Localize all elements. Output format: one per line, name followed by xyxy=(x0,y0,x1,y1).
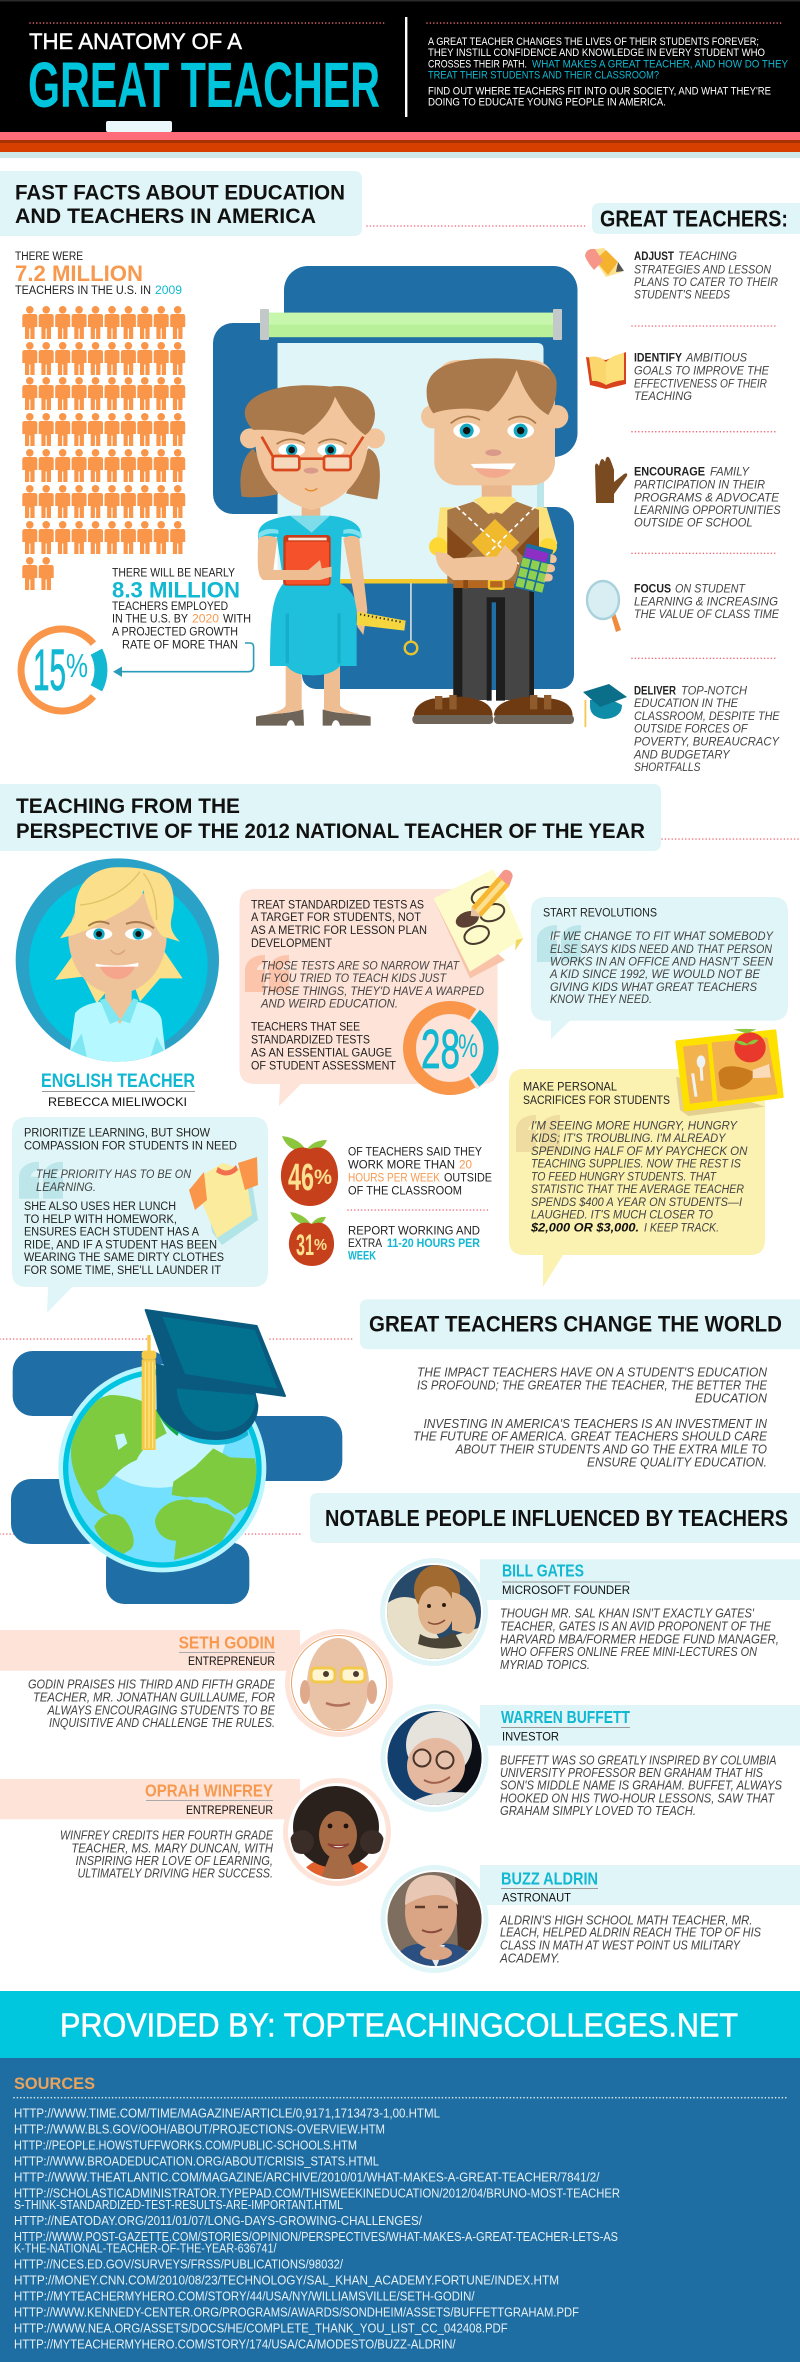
source links: HTTP://WWW.TIME.COM/TIME/MAGAZINE/ARTICLE/0,9171,1713473-1,00.HTML xyxy=(14,2107,440,2121)
text: impact of teachers: THE IMPACT TEACHERS HAVE ON A STUDENT'S EDUCATION xyxy=(417,1366,768,1380)
quote: revolutions: A KID SINCE 1992, WE WOULD NOT BE xyxy=(549,969,760,981)
blue bars xyxy=(11,1351,342,1604)
profile: seth godin xyxy=(0,1629,393,1737)
text: oprah winfrey: ULTIMATELY DRIVING HER SUCCESS. xyxy=(78,1867,273,1881)
text: treat standardized tests xyxy=(251,899,427,950)
text: lunch help: TO HELP WITH HOMEWORK, xyxy=(24,1214,177,1226)
heading: prioritize learning xyxy=(24,1128,237,1152)
quote: revolutions: WORKS IN AN OFFICE AND HASN'T SEEN xyxy=(550,956,774,968)
illustration: male teacher xyxy=(412,358,574,724)
stat: 46 percent apple xyxy=(281,1136,338,1206)
item: encourage: PROGRAMS & ADVOCATE xyxy=(634,490,780,504)
icon: raised hand xyxy=(595,457,627,503)
text: impact of teachers: ENSURE QUALITY EDUCATION. xyxy=(587,1455,767,1469)
name: seth godin: ENTREPRENEUR xyxy=(188,1654,275,1668)
quote: hungry kids: I KEEP TRACK. xyxy=(644,1222,719,1234)
text: bill gates: HARVARD MBA/FORMER HEDGE FUND MANAGER, xyxy=(500,1632,779,1646)
banner: provided by xyxy=(0,1991,800,2058)
text: impact of teachers: EDUCATION xyxy=(695,1391,768,1405)
text: warren buffett xyxy=(500,1753,783,1818)
heading: great teachers change the world xyxy=(360,1299,800,1349)
item: deliver: SHORTFALLS xyxy=(634,760,700,774)
quote: narrow tests: THOSE THINGS, THEY'D HAVE A WARPED xyxy=(261,986,484,998)
trousers xyxy=(453,587,534,703)
calculator xyxy=(514,543,557,594)
title xyxy=(28,29,380,121)
item: identify: EFFECTIVENESS OF THEIR xyxy=(634,376,767,390)
item: focus: FOCUS xyxy=(634,582,671,596)
item: focus: LEARNING & INCREASING xyxy=(634,594,778,608)
quote: revolutions: ELSE SAYS KIDS NEED AND THAT PERSON xyxy=(550,944,773,956)
stat: 8.3 million projection: 8.3 MILLION xyxy=(112,577,240,602)
text: lunch help xyxy=(24,1201,224,1277)
photo: warren buffett xyxy=(380,1704,488,1812)
stat: 7.2 million teachers: TEACHERS IN THE U.S. IN xyxy=(15,285,151,297)
text: warren buffett: UNIVERSITY PROFESSOR BEN GRAHAM THAT HIS xyxy=(500,1766,764,1780)
arrow to 15 percent xyxy=(113,643,254,677)
text: lunch help: ENSURES EACH STUDENT HAS A xyxy=(24,1227,199,1239)
name: bill gates: BILL GATES xyxy=(502,1561,584,1581)
heading: sources: SOURCES xyxy=(14,2074,95,2093)
shirt xyxy=(430,507,557,555)
stat: 8.3 million projection: WITH xyxy=(223,614,251,626)
ruler xyxy=(357,612,406,631)
stat: 31 percent apple: % xyxy=(314,1237,327,1254)
donut: 15 percent: % xyxy=(66,647,88,684)
item: adjust: STUDENT'S NEEDS xyxy=(634,288,730,302)
stat: 8.3 million projection: TEACHERS EMPLOYED xyxy=(112,601,228,613)
quote: hungry kids xyxy=(530,1120,748,1234)
stat: 31 percent apple xyxy=(289,1212,334,1266)
graduation cap xyxy=(146,1310,285,1445)
quote: revolutions: KNOW THEY NEED. xyxy=(550,994,652,1006)
header intro text: CROSSES THEIR PATH. xyxy=(428,58,527,70)
stat: 46 percent apple: % xyxy=(314,1166,332,1189)
donut: 28 percent xyxy=(410,1008,491,1088)
chalk xyxy=(106,121,172,132)
stat: 8.3 million projection: 2020 xyxy=(192,614,219,626)
text: oprah winfrey: INSPIRING HER LOVE OF LEARNING, xyxy=(76,1854,273,1868)
quote: hungry kids: SPENDING HALF OF MY PAYCHECK ON xyxy=(531,1146,748,1158)
stat: 31 percent apple: 31 xyxy=(296,1229,314,1262)
quote mark xyxy=(516,1115,560,1152)
source links: HTTP://MYTEACHERMYHERO.COM/STORY/44/USA/NY/WILLIAMSVILLE/SETH-GODIN/ xyxy=(14,2289,475,2303)
stat: 7.2 million teachers: THERE WERE xyxy=(15,251,83,263)
item: identify: AMBITIOUS xyxy=(685,351,747,365)
item: adjust: PLANS TO CATER TO THEIR xyxy=(634,275,778,289)
text: 31 percent: EXTRA xyxy=(348,1238,382,1250)
item: deliver: OUTSIDE FORCES OF xyxy=(634,722,748,736)
text: impact of teachers xyxy=(413,1366,768,1469)
profile: warren buffett xyxy=(380,1704,800,1818)
quote: hungry kids: KIDS; IT'S TROUBLING. I'M ALREADY xyxy=(531,1133,727,1145)
shoes xyxy=(256,709,371,726)
text: oprah winfrey: TEACHER, MS. MARY DUNCAN, WITH xyxy=(71,1841,274,1855)
source links: S-THINK-STANDARDIZED-TEST-RESULTS-ARE-IMPORTANT.HTML xyxy=(14,2198,343,2212)
heading: start revolutions: START REVOLUTIONS xyxy=(543,908,657,920)
item: adjust: ADJUST xyxy=(634,249,675,263)
icon: sticky note and pencil xyxy=(433,869,523,978)
text: 31 percent: WEEK xyxy=(348,1251,377,1263)
item: identify xyxy=(634,351,770,403)
bubble: start revolutions xyxy=(531,897,788,1039)
text: teachers that see tests xyxy=(251,1022,396,1072)
text: seth godin: INQUISITIVE AND CHALLENGE THE RULES. xyxy=(49,1716,275,1730)
item: encourage: OUTSIDE OF SCHOOL xyxy=(634,516,753,530)
text: treat standardized tests: A TARGET FOR STUDENTS, NOT xyxy=(251,912,421,924)
text: 31 percent xyxy=(348,1225,481,1263)
quote mark xyxy=(19,1162,63,1199)
item: adjust xyxy=(634,249,778,302)
name: bill gates: MICROSOFT FOUNDER xyxy=(502,1583,630,1597)
name: buzz aldrin: ASTRONAUT xyxy=(502,1891,572,1905)
quote: revolutions: GIVING KIDS WHAT GREAT TEACHERS xyxy=(550,982,757,994)
item: encourage: FAMILY xyxy=(710,465,750,479)
text: bill gates: TEACHER, GATES IS AN AVID PROPONENT OF THE xyxy=(500,1619,772,1633)
title: THE ANATOMY OF A xyxy=(29,29,242,54)
text: bill gates: WHO OFFERS ONLINE FREE MINI-LECTURES ON xyxy=(500,1645,758,1659)
text: impact of teachers: THE FUTURE OF AMERICA. GREAT TEACHERS SHOULD CARE xyxy=(413,1430,768,1444)
heading: notable people xyxy=(310,1493,800,1543)
text: 46 percent: OUTSIDE xyxy=(444,1173,492,1185)
quote: revolutions: IF WE CHANGE TO FIT WHAT SOMEBODY xyxy=(550,931,774,943)
item: focus: ON STUDENT xyxy=(675,582,746,596)
quote: priority: LEARNING. xyxy=(36,1182,96,1194)
name: buzz aldrin: BUZZ ALDRIN xyxy=(501,1868,598,1888)
heading: personal sacrifices xyxy=(523,1082,670,1107)
arm xyxy=(435,545,517,580)
name: buzz aldrin xyxy=(501,1868,598,1905)
source links: HTTP://NCES.ED.GOV/SURVEYS/FRSS/PUBLICATIONS/98032/ xyxy=(14,2257,343,2271)
mouth xyxy=(471,463,516,478)
eyes xyxy=(277,439,347,457)
quote: hungry kids: I'M SEEING MORE HUNGRY, HUNGRY xyxy=(531,1120,738,1132)
item: deliver: DELIVER xyxy=(634,683,676,697)
item: identify: GOALS TO IMPROVE THE xyxy=(634,364,770,378)
illustration: female teacher xyxy=(240,385,406,726)
stat: 7.2 million teachers xyxy=(15,251,182,297)
text: 46 percent: 20 xyxy=(459,1160,472,1172)
icon: t-shirt xyxy=(189,1157,258,1245)
illustration: globe with graduation cap xyxy=(11,1310,342,1604)
item: encourage: LEARNING OPPORTUNITIES xyxy=(634,503,781,517)
donut: 28 percent: 28 xyxy=(421,1018,460,1080)
text: lunch help: WEARING THE SAME DIRTY CLOTHES xyxy=(24,1252,224,1264)
quote mark xyxy=(537,925,581,962)
text: warren buffett: HOOKED ON HIS TWO-HOUR LESSONS, SAW THAT xyxy=(500,1791,775,1805)
icon: magnifying glass xyxy=(587,581,621,632)
text: bill gates: THOUGH MR. SAL KHAN ISN'T EXACTLY GATES' xyxy=(500,1607,755,1621)
item: focus xyxy=(634,582,780,621)
heading: national teacher of the year: PERSPECTIVE OF THE 2012 NATIONAL TEACHER OF THE YEAR xyxy=(16,819,645,843)
caption: english teacher xyxy=(41,1071,195,1109)
source links: HTTP://WWW.BROADEDUCATION.ORG/ABOUT/CRISIS_STATS.HTML xyxy=(14,2155,379,2169)
quote: narrow tests: AND WEIRD EDUCATION. xyxy=(260,999,398,1011)
text: 31 percent: REPORT WORKING AND xyxy=(348,1225,480,1237)
heading: personal sacrifices: MAKE PERSONAL xyxy=(523,1082,618,1094)
title: GREAT TEACHER xyxy=(28,49,380,121)
text: 46 percent xyxy=(348,1147,492,1197)
quote: priority: THE PRIORITY HAS TO BE ON xyxy=(36,1169,192,1181)
arms xyxy=(258,536,332,580)
tassel xyxy=(142,1335,156,1450)
portrait: english teacher xyxy=(16,858,219,1063)
profile: bill gates xyxy=(380,1558,800,1672)
text: 46 percent: HOURS PER WEEK xyxy=(348,1173,440,1185)
name: seth godin xyxy=(179,1632,275,1668)
globe xyxy=(58,1360,266,1572)
quote: narrow tests: THOSE TESTS ARE SO NARROW THAT xyxy=(261,960,460,972)
heading: great teachers change the world: GREAT TEACHERS CHANGE THE WORLD xyxy=(369,1312,782,1337)
text: buzz aldrin: ACADEMY. xyxy=(499,1951,560,1965)
text: buzz aldrin: CLASS IN MATH AT WEST POINT US MILITARY xyxy=(500,1938,741,1952)
blind cord and ring xyxy=(405,583,417,654)
text: impact of teachers: INVESTING IN AMERICA'S TEACHERS IS AN INVESTMENT IN xyxy=(424,1417,768,1431)
item: encourage xyxy=(634,465,781,530)
text: 31 percent: 11-20 HOURS PER xyxy=(387,1238,481,1250)
source links: HTTP://MYTEACHERMYHERO.COM/STORY/174/USA/CA/MODESTO/BUZZ-ALDRIN/ xyxy=(14,2337,456,2351)
name: oprah winfrey xyxy=(145,1781,273,1817)
item: deliver: EDUCATION IN THE xyxy=(634,696,739,710)
source links: K-THE-NATIONAL-TEACHER-OF-THE-YEAR-636741/ xyxy=(14,2241,277,2255)
text: oprah winfrey xyxy=(60,1829,274,1881)
name: oprah winfrey: OPRAH WINFREY xyxy=(145,1781,273,1801)
heading: prioritize learning: COMPASSION FOR STUDENTS IN NEED xyxy=(24,1140,237,1152)
photo: oprah winfrey xyxy=(283,1778,391,1886)
name: oprah winfrey: ENTREPRENEUR xyxy=(186,1803,273,1817)
quote: revolutions xyxy=(549,931,774,1006)
quote: priority xyxy=(36,1169,192,1194)
text: 46 percent: OF TEACHERS SAID THEY xyxy=(348,1147,482,1159)
item: deliver: CLASSROOM, DESPITE THE xyxy=(634,709,780,723)
text: seth godin: ALWAYS ENCOURAGING STUDENTS TO BE xyxy=(47,1703,276,1717)
icon: open book xyxy=(586,352,626,389)
quote: hungry kids: LAUGHED. IT'S MUCH CLOSER TO xyxy=(531,1210,713,1222)
stat: 7.2 million teachers: 7.2 MILLION xyxy=(15,261,143,286)
text: lunch help: FOR SOME TIME, SHE'LL LAUNDER IT xyxy=(24,1265,221,1277)
stat: 8.3 million projection: RATE OF MORE THAN xyxy=(122,640,238,652)
item: adjust: STRATEGIES AND LESSON xyxy=(634,262,771,276)
heading: national teacher of the year xyxy=(0,784,661,851)
text: teachers that see tests: TEACHERS THAT SEE xyxy=(251,1022,360,1034)
text: bill gates xyxy=(500,1607,779,1672)
head xyxy=(434,360,555,485)
text: seth godin: TEACHER, MR. JONATHAN GUILLAUME, FOR xyxy=(33,1690,275,1704)
text: lunch help: RIDE, AND IF A STUDENT HAS BEEN xyxy=(24,1240,217,1252)
text: treat standardized tests: DEVELOPMENT xyxy=(251,938,332,950)
stat: 46 percent apple: 46 xyxy=(288,1157,314,1199)
text: buzz aldrin: LEACH, HELPED ALDRIN REACH THE TOP OF HIS xyxy=(500,1926,762,1940)
source links: HTTP://NEATODAY.ORG/2011/01/07/LONG-DAYS-GROWING-CHALLENGES/ xyxy=(14,2214,422,2228)
photo: bill gates xyxy=(380,1558,488,1666)
text: impact of teachers: IS PROFOUND; THE GREATER THE TEACHER, THE BETTER THE xyxy=(417,1378,768,1392)
header intro text xyxy=(428,36,789,108)
name: bill gates xyxy=(502,1561,630,1597)
quote: hungry kids: TEACHING SUPPLIES. NOW THE REST IS xyxy=(531,1159,741,1171)
profile: oprah winfrey xyxy=(0,1778,391,1886)
stat: 8.3 million projection xyxy=(112,568,251,652)
name: warren buffett: INVESTOR xyxy=(502,1730,559,1744)
donut: 15 percent xyxy=(21,629,101,711)
source links: HTTP://WWW.THEATLANTIC.COM/MAGAZINE/ARCHIVE/2010/01/WHAT-MAKES-A-GREAT-TEACHER/7841/2/ xyxy=(14,2171,600,2185)
item: adjust: TEACHING xyxy=(678,249,737,263)
book xyxy=(283,535,331,586)
vest xyxy=(447,497,539,583)
caption: english teacher: ENGLISH TEACHER xyxy=(41,1071,195,1092)
item: deliver: TOP-NOTCH xyxy=(681,683,747,697)
icon: graduation cap xyxy=(583,684,627,727)
heading: fast facts: AND TEACHERS IN AMERICA xyxy=(15,204,316,228)
dress xyxy=(258,516,361,675)
header intro text: DOING TO EDUCATE YOUNG PEOPLE IN AMERICA. xyxy=(428,96,666,108)
head xyxy=(255,390,368,510)
item: encourage: ENCOURAGE xyxy=(634,465,705,479)
quote: hungry kids: SPENDS $400 A YEAR ON STUDENTS—I xyxy=(531,1197,743,1209)
eyes xyxy=(451,417,536,439)
text: 46 percent: WORK MORE THAN xyxy=(348,1160,455,1172)
glasses xyxy=(262,437,363,470)
text: treat standardized tests: AS A METRIC FOR LESSON PLAN xyxy=(251,925,427,937)
stat: 8.3 million projection: A PROJECTED GROWTH xyxy=(112,627,238,639)
text: warren buffett: GRAHAM SIMPLY LOVED TO TEACH. xyxy=(500,1804,696,1818)
bubble: personal sacrifices xyxy=(509,1029,782,1287)
bubble: standardized tests xyxy=(240,869,523,1106)
bubble: prioritize learning xyxy=(12,1117,268,1313)
quote: hungry kids: TO FEED HUNGRY STUDENTS. THAT xyxy=(531,1171,717,1183)
text: treat standardized tests: TREAT STANDARDIZED TESTS AS xyxy=(251,899,424,911)
quote: narrow tests: IF YOU TRIED TO TEACH KIDS JUST xyxy=(261,973,447,985)
heading: fast facts: FAST FACTS ABOUT EDUCATION xyxy=(15,180,345,204)
illustration: classroom backdrop xyxy=(213,266,578,689)
shoes xyxy=(412,695,574,724)
heading: fast facts xyxy=(0,171,362,236)
item: identify: IDENTIFY xyxy=(634,351,682,365)
stat: 8.3 million projection: IN THE U.S. BY xyxy=(112,614,188,626)
text: teachers that see tests: OF STUDENT ASSESSMENT xyxy=(251,1060,396,1072)
caption: english teacher: REBECCA MIELIWOCKI xyxy=(48,1095,187,1109)
list: great teachers xyxy=(583,248,781,774)
name: seth godin: SETH GODIN xyxy=(179,1632,275,1652)
item: deliver: AND BUDGETARY xyxy=(633,747,731,761)
name: warren buffett xyxy=(501,1707,630,1744)
window blind roller xyxy=(260,309,562,340)
icon: pencil and eraser xyxy=(585,248,624,277)
quote: hungry kids: $2,000 OR $3,000. xyxy=(530,1222,639,1234)
item: identify: TEACHING xyxy=(634,389,692,403)
source links: HTTP://WWW.POST-GAZETTE.COM/STORIES/OPINION/PERSPECTIVES/WHAT-MAKES-A-GREAT-TEACHER-LETS-AS xyxy=(14,2230,618,2244)
photo: buzz aldrin xyxy=(380,1865,488,1973)
source links: HTTP://WWW.NEA.ORG/ASSETS/DOCS/HE/COMPLETE_THANK_YOU_LIST_CC_042408.PDF xyxy=(14,2321,508,2335)
source links: HTTP://SCHOLASTICADMINISTRATOR.TYPEPAD.COM/THISWEEKINEDUCATION/2012/04/BRUNO-MOST-TEACHER xyxy=(14,2187,620,2201)
text: buzz aldrin xyxy=(499,1913,762,1965)
banner: provided by: PROVIDED BY: TOPTEACHINGCOLLEGES.NET xyxy=(60,2007,738,2044)
heading: national teacher of the year: TEACHING FROM THE xyxy=(16,794,240,818)
stat: 7.2 million teachers: 2009 xyxy=(155,285,182,297)
source links: HTTP://WWW.BLS.GOV/OOH/ABOUT/PROJECTIONS-OVERVIEW.HTM xyxy=(14,2123,385,2137)
belt xyxy=(453,579,514,589)
chalkboard ledge stripes xyxy=(0,132,800,158)
quote: hungry kids: STATISTIC THAT THE AVERAGE TEACHER xyxy=(531,1184,744,1196)
source links: HTTP://PEOPLE.HOWSTUFFWORKS.COM/PUBLIC-SCHOOLS.HTM xyxy=(14,2139,357,2153)
panel: sources xyxy=(0,2058,800,2362)
stat: 8.3 million projection: THERE WILL BE NEARLY xyxy=(112,568,235,580)
item: deliver: POVERTY, BUREAUCRACY xyxy=(634,734,780,748)
text: bill gates: MYRIAD TOPICS. xyxy=(500,1658,590,1672)
profile: buzz aldrin xyxy=(380,1865,800,1973)
item: deliver xyxy=(633,683,780,774)
text: lunch help: SHE ALSO USES HER LUNCH xyxy=(24,1201,176,1213)
text: buzz aldrin: ALDRIN'S HIGH SCHOOL MATH TEACHER, MR. xyxy=(499,1913,752,1927)
icon: lunch tray xyxy=(676,1029,782,1116)
item: encourage: PARTICIPATION IN THEIR xyxy=(634,477,765,491)
text: seth godin: GODIN PRAISES HIS THIRD AND FIFTH GRADE xyxy=(28,1677,276,1691)
name: warren buffett: WARREN BUFFETT xyxy=(501,1707,630,1727)
donut: 28 percent: % xyxy=(458,1028,478,1064)
text: teachers that see tests: AS AN ESSENTIAL GAUGE xyxy=(251,1048,392,1060)
text: 46 percent: OF THE CLASSROOM xyxy=(348,1185,462,1197)
source links xyxy=(14,2107,620,2351)
donut: 15 percent: 15 xyxy=(33,638,66,703)
photo: seth godin xyxy=(285,1629,393,1737)
quote mark xyxy=(245,955,289,992)
heading: prioritize learning: PRIORITIZE LEARNING, BUT SHOW xyxy=(24,1128,210,1140)
header banner xyxy=(0,0,800,158)
text: oprah winfrey: WINFREY CREDITS HER FOURTH GRADE xyxy=(60,1829,274,1843)
pictogram: teachers xyxy=(22,306,185,590)
header intro text: TREAT THEIR STUDENTS AND THEIR CLASSROOM? xyxy=(428,70,659,82)
source links: HTTP://WWW.KENNEDY-CENTER.ORG/PROGRAMS/AWARDS/SONDHEIM/ASSETS/BUFFETTGRAHAM.PDF xyxy=(14,2305,579,2319)
text: seth godin xyxy=(28,1677,276,1730)
text: teachers that see tests: STANDARDIZED TESTS xyxy=(251,1034,370,1046)
quote: narrow tests xyxy=(260,960,484,1011)
heading: personal sacrifices: SACRIFICES FOR STUDENTS xyxy=(523,1095,670,1107)
source links: HTTP://MONEY.CNN.COM/2010/08/23/TECHNOLOGY/SAL_KHAN_ACADEMY.FORTUNE/INDEX.HTM xyxy=(14,2273,559,2287)
item: focus: THE VALUE OF CLASS TIME xyxy=(634,607,780,621)
text: impact of teachers: ABOUT THEIR STUDENTS AND GO THE EXTRA MILE TO xyxy=(455,1443,767,1457)
